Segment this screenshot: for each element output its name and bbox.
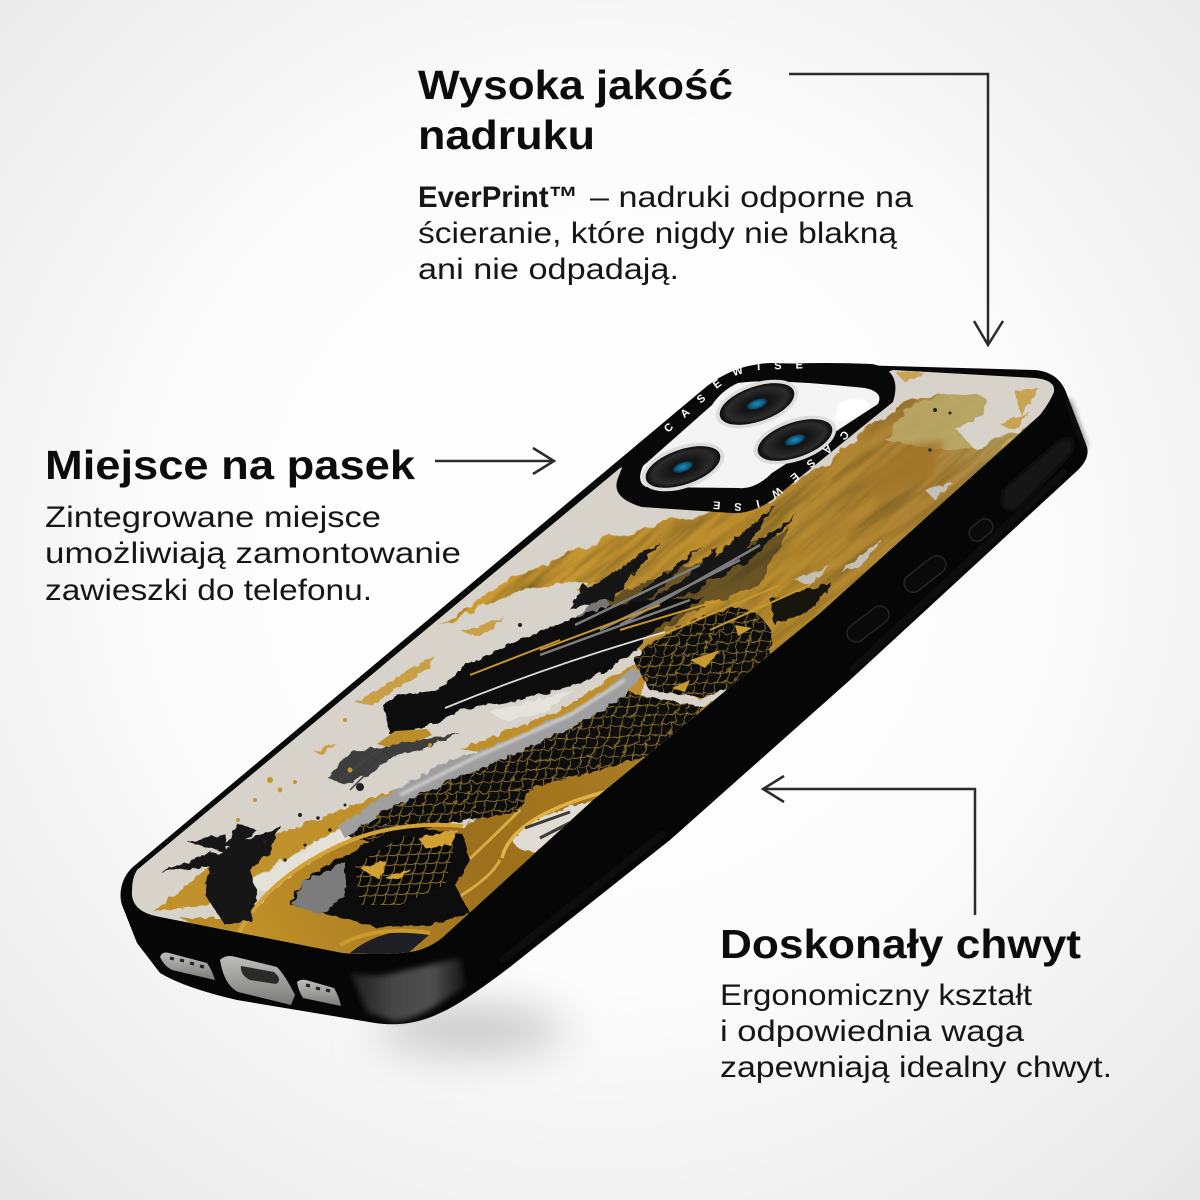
silver belly	[338, 668, 644, 838]
phone shadow	[375, 1008, 565, 1052]
artwork beige base	[120, 360, 1070, 960]
window highlight	[835, 398, 870, 421]
upper left gold flecks	[315, 580, 600, 756]
gold flecks on coil	[672, 625, 752, 692]
tail spikes	[160, 823, 256, 872]
body line two: umożliwiają zamontowanie	[45, 537, 461, 570]
speaker left	[160, 952, 215, 980]
arrow: grip	[763, 776, 975, 915]
body line three: zapewniają idealny chwyt.	[720, 1051, 1112, 1084]
splash strokes	[895, 372, 1040, 450]
callout: grip	[720, 921, 1112, 1084]
small spike	[570, 583, 600, 610]
camera bump	[616, 363, 896, 514]
whisker beard	[327, 733, 460, 785]
gold ring around coil	[239, 825, 463, 932]
charging port hole	[241, 966, 279, 984]
dragon jaw gold	[377, 729, 432, 750]
spike one	[573, 542, 660, 600]
grey breaks	[795, 482, 952, 585]
arrow: print quality	[789, 74, 1003, 345]
camera window	[640, 381, 879, 488]
pale patch left	[252, 830, 348, 892]
callout: strap slot	[45, 442, 461, 607]
body line one: Zintegrowane miejsce	[45, 501, 381, 534]
left gold diagonal	[153, 790, 405, 912]
spike four	[683, 505, 775, 583]
olive wash	[885, 392, 985, 450]
bump frame	[616, 363, 895, 513]
brand name: EverPrint™	[418, 181, 578, 214]
speaker left holes	[170, 958, 204, 967]
bump lettering bottom: CASEWISE	[713, 432, 848, 511]
body line three: zawieszki do telefonu.	[45, 574, 372, 607]
lens right	[748, 406, 842, 474]
tail body	[205, 825, 280, 925]
white gap in swirl	[512, 801, 592, 852]
arrow: strap slot	[435, 448, 554, 474]
spike five	[713, 515, 797, 570]
bottom left gold	[179, 916, 300, 944]
dragon upper coil	[633, 607, 772, 697]
gold field main	[438, 393, 1033, 700]
bump lettering top: CASEWISE	[664, 363, 802, 432]
small button	[966, 516, 996, 544]
phone case with dragon print	[120, 363, 1090, 1026]
dragon lower body	[239, 668, 703, 956]
gold splatter	[236, 718, 432, 822]
body scales lower band	[345, 690, 703, 842]
lower coil scales	[355, 835, 455, 905]
heading: Wysoka jakość	[418, 62, 733, 108]
body line one: Ergonomiczny kształt	[720, 979, 1032, 1012]
dragon head and neck	[383, 598, 705, 735]
top right splashes	[895, 372, 1040, 450]
gold highlight line	[460, 809, 521, 898]
lower coil black	[290, 825, 470, 927]
body line two: ścieranie, które nigdy nie blakną	[418, 217, 898, 250]
callout: print quality	[418, 62, 914, 286]
paint splatter	[263, 408, 952, 862]
gold splats	[360, 830, 458, 880]
action button	[843, 602, 893, 646]
dragon mane spikes	[570, 505, 796, 610]
charging port	[220, 956, 295, 1005]
bottom coil rim	[340, 931, 430, 945]
spike two	[600, 545, 703, 623]
body line two: i odpowiednia waga	[720, 1015, 1025, 1048]
body line one: – nadruki odporne na	[590, 181, 914, 214]
volume button	[901, 552, 949, 596]
body line three: ani nie odpadają.	[418, 253, 679, 286]
mane grey streaks	[540, 545, 760, 655]
belly highlight	[400, 680, 625, 795]
heading line two: nadruku	[418, 112, 595, 158]
brown wash	[870, 438, 946, 502]
speaker right	[297, 980, 341, 1006]
power button bulge	[1002, 438, 1073, 510]
grey coil	[292, 862, 345, 915]
dragon tail claw	[160, 823, 280, 925]
dark streaks on gold	[770, 583, 832, 625]
rim highlight	[500, 400, 1085, 962]
swirl dark streaks	[524, 810, 570, 840]
pale mouth patch	[490, 690, 575, 722]
mid gold strip	[460, 664, 650, 752]
bottom small coil	[350, 932, 430, 954]
lower gold mass	[240, 700, 713, 954]
spike three	[630, 547, 717, 612]
side buttons	[843, 516, 996, 646]
swirl rim	[502, 790, 612, 858]
heading: Miejsce na pasek	[45, 442, 415, 488]
corner sheen	[350, 958, 466, 1021]
speaker right holes	[306, 985, 330, 991]
heading: Doskonały chwyt	[720, 921, 1081, 967]
head silver line	[445, 632, 665, 708]
gold streaks over mane	[470, 585, 810, 675]
lens top	[710, 370, 804, 438]
printed artwork	[132, 370, 1054, 954]
mane dark haze	[576, 527, 789, 639]
lens left	[636, 433, 730, 501]
bottom ports	[160, 952, 341, 1006]
case body	[120, 363, 1088, 1024]
whisker strands	[340, 752, 385, 790]
